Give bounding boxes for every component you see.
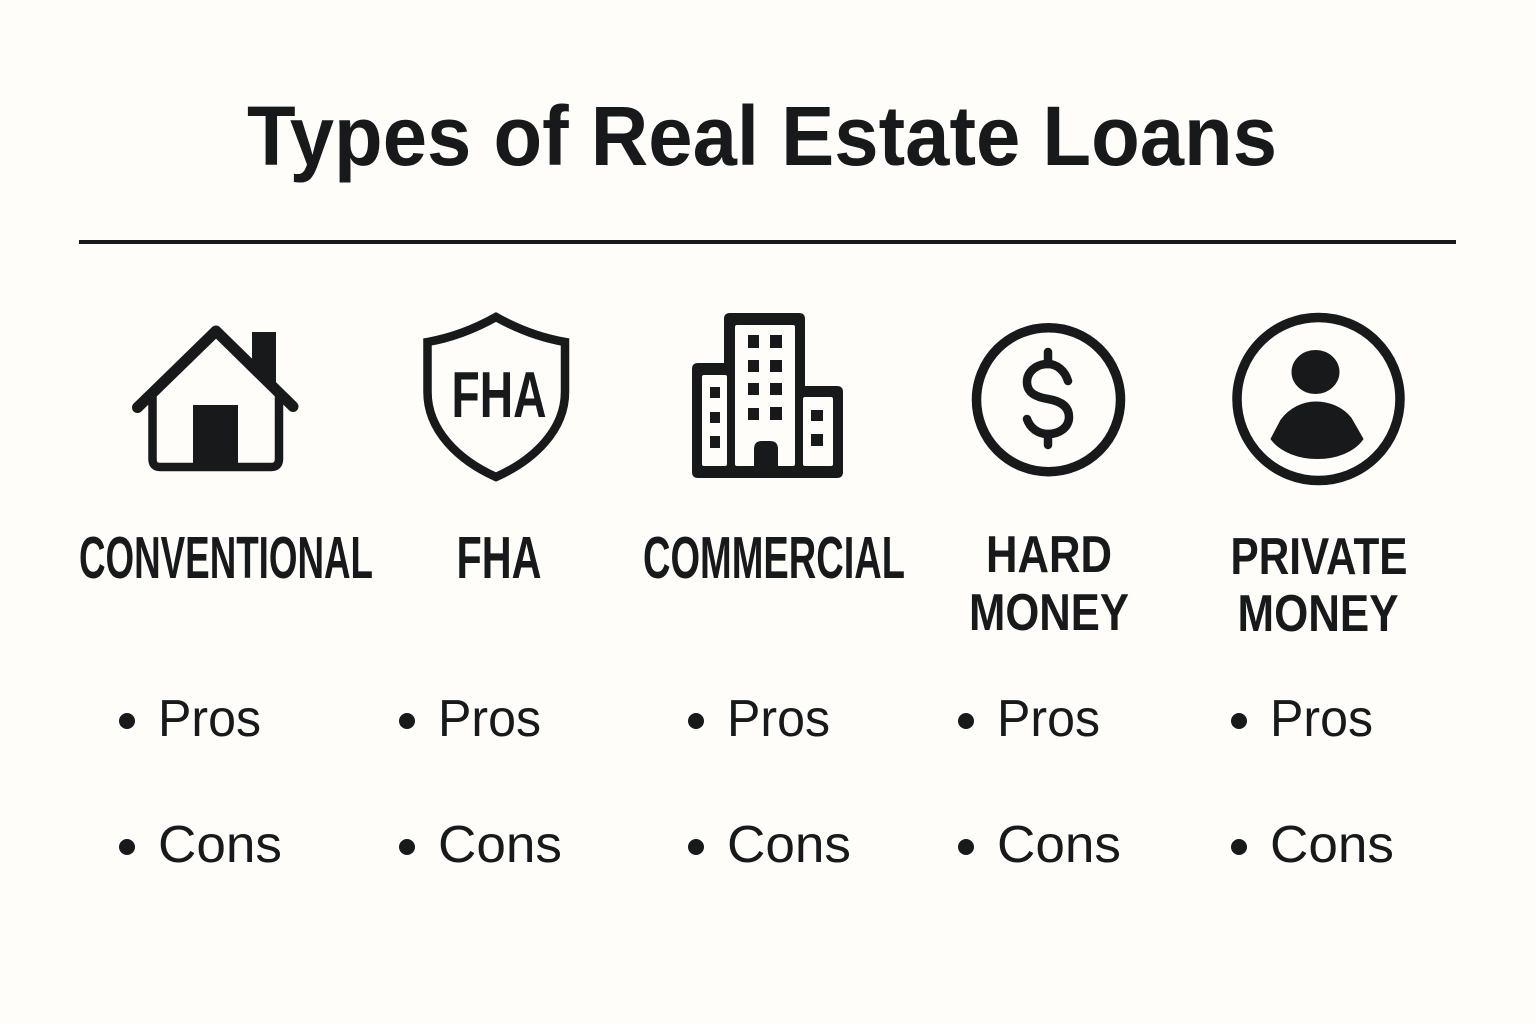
label: private money: MONEY <box>1238 585 1398 643</box>
list: commercial pros and cons: Cons <box>727 816 851 874</box>
list: commercial pros and cons <box>688 690 851 874</box>
title: Types of Real Estate Loans <box>247 89 1277 183</box>
label: hard money <box>969 526 1129 642</box>
label: hard money: MONEY <box>969 584 1129 642</box>
icon: house <box>138 331 293 467</box>
icon: FHA shield <box>428 317 565 477</box>
label: commercial: COMMERCIAL <box>643 525 905 591</box>
label: hard money: HARD <box>986 526 1112 584</box>
list: FHA pros and cons: Pros <box>438 690 541 748</box>
list: conventional pros and cons: Pros <box>158 690 261 748</box>
list: private money pros and cons: Cons <box>1270 816 1394 874</box>
icon: dollar coin <box>976 328 1120 472</box>
list: private money pros and cons: Pros <box>1270 690 1373 748</box>
list: FHA pros and cons: Cons <box>438 816 562 874</box>
list: private money pros and cons <box>1231 690 1394 874</box>
label: FHA: FHA <box>456 525 542 591</box>
list: hard money pros and cons <box>958 690 1121 874</box>
icon: FHA shield: FHA <box>452 358 546 431</box>
list: conventional pros and cons: Cons <box>158 816 282 874</box>
list: hard money pros and cons: Pros <box>997 690 1100 748</box>
list: FHA pros and cons <box>399 690 562 874</box>
list: conventional pros and cons <box>119 690 282 874</box>
icon: commercial building <box>692 313 843 478</box>
label: private money <box>1230 528 1408 643</box>
icon: person in circle <box>1237 318 1400 480</box>
label: private money: PRIVATE <box>1230 528 1408 586</box>
label: conventional: CONVENTIONAL <box>79 525 373 591</box>
list: commercial pros and cons: Pros <box>727 690 830 748</box>
list: hard money pros and cons: Cons <box>997 816 1121 874</box>
